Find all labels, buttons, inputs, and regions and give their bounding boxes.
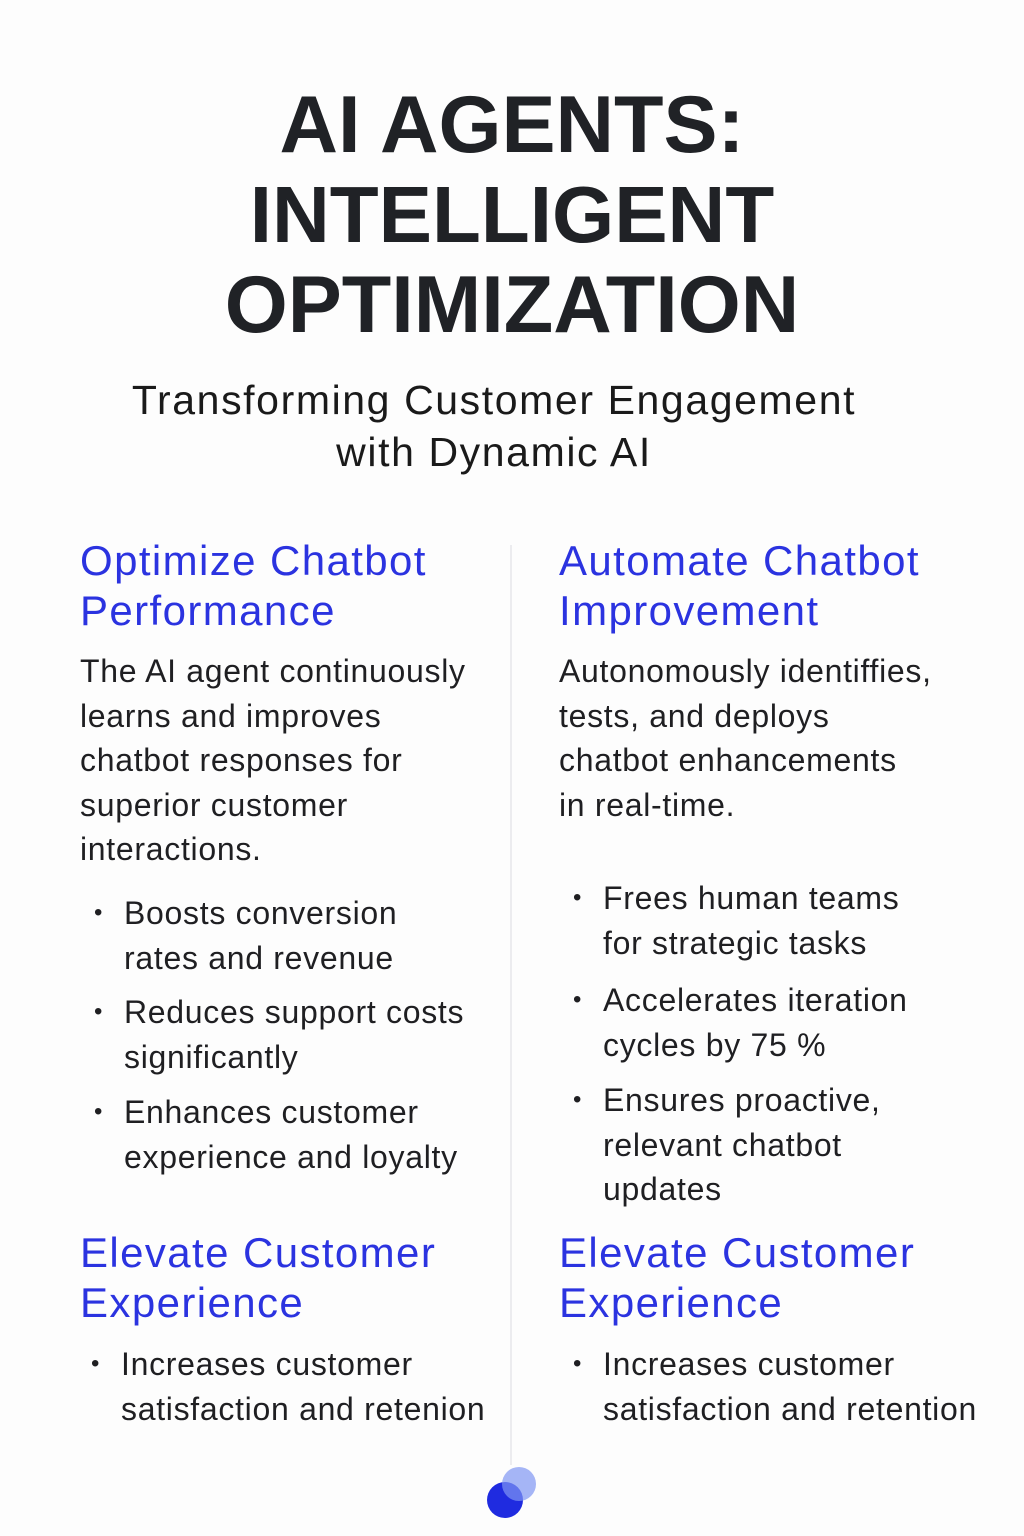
title: AI AGENTS: [280,80,744,170]
icon: overlapping circles [487,1467,536,1518]
heading: Elevate Customer [559,1229,915,1276]
bullet list: Frees human teams [603,880,899,916]
subtitle: with Dynamic AI [336,429,652,475]
heading: Improvement [559,587,820,634]
bullet list: Ensures proactive, [603,1082,881,1118]
description: superior customer [80,786,348,822]
bullet list: updates [603,1171,722,1207]
description: chatbot enhancements [559,742,897,778]
heading: Automate Chatbot [559,537,920,584]
subtitle [132,377,856,475]
divider line [510,545,512,1465]
bullet list: cycles by 75 % [603,1026,826,1062]
panel: elevate customer experience left [80,1229,485,1426]
bullet list: Accelerates iteration [603,982,908,1018]
bullet list: rates and revenue [124,940,394,976]
bullet: satisfaction and retenion [121,1390,485,1426]
panel: automate chatbot improvement [559,537,932,1207]
bullet: Increases customer [603,1346,895,1382]
heading: Elevate Customer [80,1229,436,1276]
description: The AI agent continuously [80,653,466,689]
description [80,653,466,867]
bullet list: Boosts conversion [124,895,397,931]
heading: Performance [80,587,336,634]
bullet [121,1342,541,1431]
bullet list [94,895,464,1174]
panel: optimize chatbot performance [80,537,466,1174]
bullet: Increases customer [121,1346,413,1382]
subtitle: Transforming Customer Engagement [132,377,856,423]
bullet list: for strategic tasks [603,924,867,960]
title: OPTIMIZATION [225,260,799,350]
heading [80,537,427,634]
heading [80,1229,436,1326]
heading [559,537,920,634]
heading: Experience [559,1279,783,1326]
bullet list: significantly [124,1038,299,1074]
description [559,653,932,822]
title [225,80,799,350]
description: interactions. [80,831,262,867]
description: tests, and deploys [559,698,830,734]
heading: Optimize Chatbot [80,537,427,584]
bullet list: relevant chatbot [603,1126,842,1162]
bullet list [574,880,908,1207]
bullet: satisfaction and retention [603,1390,977,1426]
description: chatbot responses for [80,742,402,778]
bullet [603,1342,1023,1431]
title: INTELLIGENT [250,170,774,259]
description: learns and improves [80,698,381,734]
bullet list: Enhances customer [124,1094,419,1130]
description: in real-time. [559,786,735,822]
panel: elevate customer experience right [559,1229,977,1426]
heading: Experience [80,1279,304,1326]
description: Autonomously identiffies, [559,653,932,689]
heading [559,1229,915,1326]
bullet list: experience and loyalty [124,1138,458,1174]
bullet list: Reduces support costs [124,994,464,1030]
